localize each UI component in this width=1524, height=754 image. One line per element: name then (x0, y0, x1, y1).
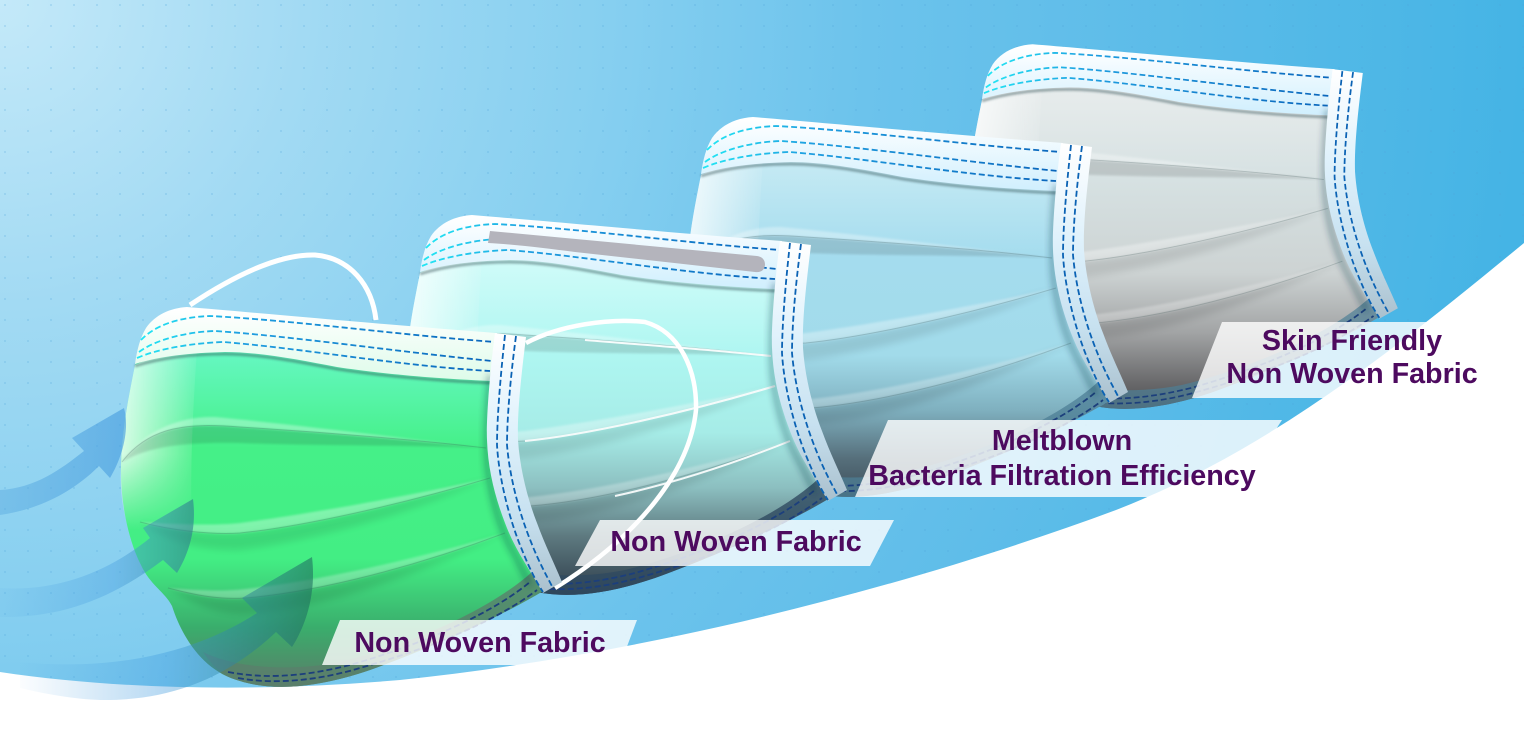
nose strip (488, 231, 765, 272)
label: non woven fabric second (575, 520, 894, 566)
mask 4: skin friendly layer (968, 44, 1398, 409)
label: skin friendly: Skin Friendly (1262, 325, 1442, 357)
airflow arrows (0, 408, 313, 700)
mask 1: green front layer (121, 307, 562, 687)
label: meltblown (855, 420, 1282, 497)
white pleat highlights (525, 340, 790, 496)
label: skin friendly: Non Woven Fabric (1226, 358, 1478, 390)
arrow 1 (0, 408, 126, 515)
ear loop of front mask (190, 255, 376, 320)
label: meltblown: Bacteria Filtration Efficiency (868, 460, 1256, 492)
label: meltblown: Meltblown (992, 425, 1132, 457)
arrow 3 (20, 557, 313, 700)
ear loop of mask 2 (526, 321, 696, 588)
label: skin friendly (1192, 322, 1524, 398)
label: non woven fabric outer: Non Woven Fabric (354, 627, 606, 659)
white curved bottom area (0, 243, 1524, 754)
label: non woven fabric second: Non Woven Fabric (610, 526, 862, 558)
arrow 2 (0, 499, 194, 617)
mask 2: non woven layer with nose strip (406, 215, 847, 595)
mask 3: meltblown layer (687, 117, 1128, 497)
label: non woven fabric outer (322, 620, 637, 665)
